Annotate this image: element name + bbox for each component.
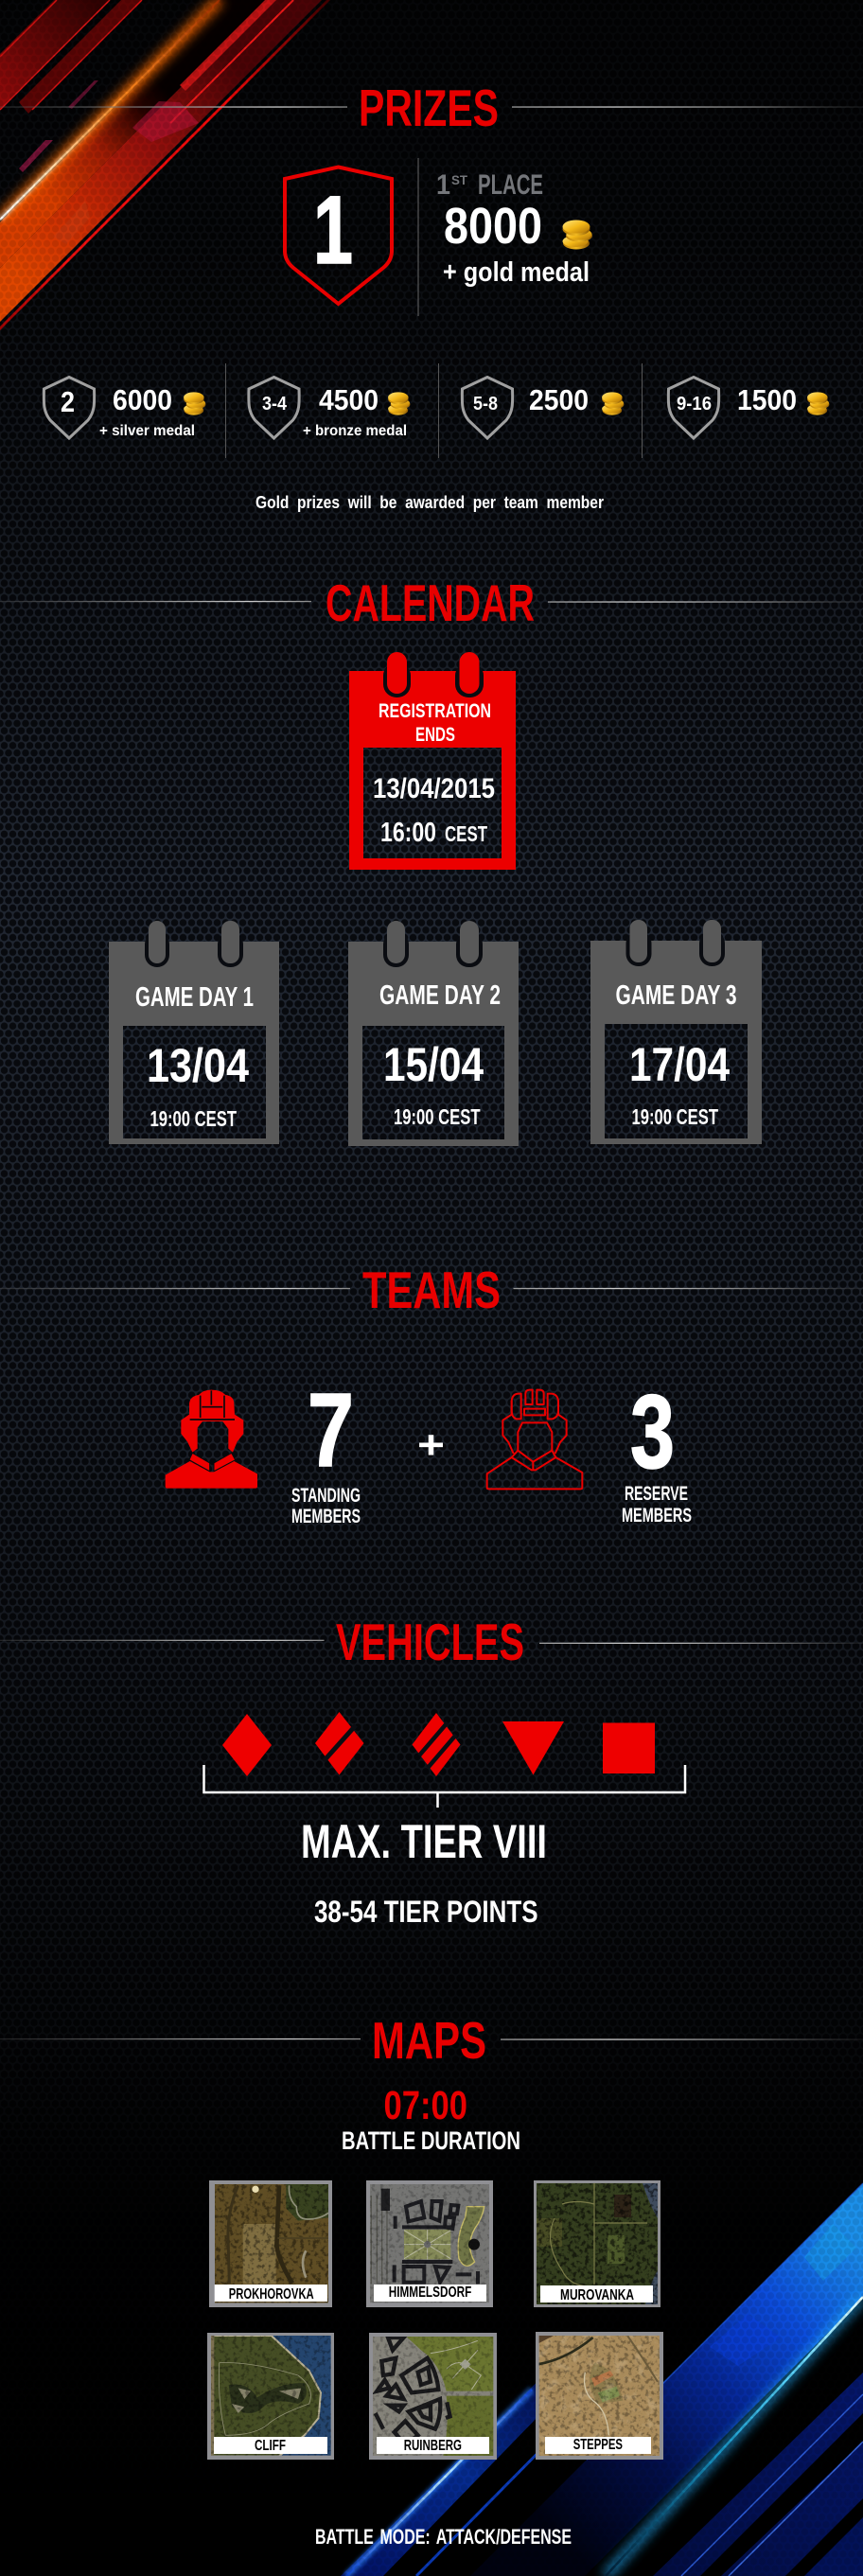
- first place shield: 1: [313, 176, 353, 284]
- first place shield: [285, 167, 392, 304]
- bracket: [204, 1765, 685, 1808]
- seven standing members: [291, 1372, 361, 1527]
- divider: [438, 363, 439, 458]
- map: Himmelsdorf: [366, 2180, 493, 2307]
- battle duration value: 07:00: [384, 2083, 467, 2128]
- prize note: Gold prizes will be awarded per team member: [255, 493, 604, 512]
- first place label: 1: [436, 169, 450, 201]
- prizes heading: PRIZES: [359, 79, 499, 137]
- map: Cliff: CLIFF: [255, 2438, 286, 2454]
- icon: artillery: [603, 1722, 655, 1773]
- first place amount: 8000: [444, 198, 542, 255]
- fifth to eighth place prize: 2500: [529, 383, 589, 416]
- first place label: ST: [451, 172, 467, 187]
- ninth to sixteenth place prize: 1500: [737, 383, 797, 416]
- calendar heading: CALENDAR: [326, 573, 535, 632]
- calendar: game day 3: GAME DAY 3: [615, 980, 736, 1011]
- vehicles heading: VEHICLES: [336, 1613, 524, 1671]
- third to fourth place prize: 4500: [319, 383, 379, 416]
- calendar: game day 1: [109, 921, 279, 1144]
- calendar: game day 3: [590, 920, 762, 1144]
- calendar: registration ends: 13/04/2015: [373, 773, 495, 804]
- calendar: game day 2: 19:00 CEST: [394, 1104, 481, 1129]
- icon: tank destroyer: [502, 1721, 564, 1775]
- icon: reserve member helmet: [487, 1390, 582, 1489]
- teams heading: TEAMS: [362, 1261, 501, 1319]
- section: calendar: [0, 573, 863, 1146]
- third to fourth place prize: 3-4: [262, 394, 288, 415]
- icon: gold coins: [562, 220, 592, 250]
- calendar: registration ends: ENDS: [415, 724, 455, 746]
- map: Murovanka: [534, 2180, 660, 2307]
- map: Prokhorovka: [209, 2180, 332, 2307]
- plus sign: +: [417, 1422, 445, 1467]
- tier points text: 38-54 TIER POINTS: [314, 1895, 537, 1929]
- divider: [225, 363, 226, 458]
- calendar: game day 3: 17/04: [629, 1038, 730, 1091]
- map: Murovanka: MUROVANKA: [560, 2287, 634, 2303]
- calendar: game day 2: 15/04: [383, 1038, 484, 1091]
- calendar: game day 1: GAME DAY 1: [135, 982, 254, 1013]
- map: Ruinberg: [369, 2333, 497, 2460]
- calendar: game day 1: 19:00 CEST: [150, 1106, 237, 1131]
- max tier text: MAX. TIER VIII: [301, 1815, 547, 1868]
- ninth to sixteenth place prize: 9-16: [677, 394, 712, 415]
- seven standing members: MEMBERS: [291, 1506, 361, 1527]
- calendar: registration ends: CEST: [445, 821, 487, 846]
- three reserve members: 3: [630, 1374, 675, 1491]
- calendar: game day 2: GAME DAY 2: [379, 980, 501, 1011]
- map: Prokhorovka: PROKHOROVKA: [229, 2286, 314, 2303]
- icon: heavy tank: [413, 1713, 460, 1776]
- divider: [642, 363, 643, 458]
- first place divider: [418, 158, 419, 316]
- calendar: game day 2: [348, 921, 519, 1146]
- section: prizes: [0, 79, 863, 512]
- three reserve members: MEMBERS: [622, 1505, 692, 1526]
- section: teams: [0, 1261, 863, 1527]
- map: Steppes: [536, 2332, 663, 2460]
- fifth to eighth place prize: [462, 377, 624, 438]
- section: maps: [0, 2011, 863, 2549]
- three reserve members: [622, 1374, 692, 1526]
- map: Himmelsdorf: HIMMELSDORF: [389, 2285, 471, 2301]
- second place prize: 6000: [113, 383, 172, 416]
- ninth to sixteenth place prize: [668, 377, 829, 438]
- icon: standing member helmet: [166, 1390, 257, 1489]
- calendar: registration ends: 16:00: [380, 818, 436, 848]
- map: Cliff: [207, 2333, 334, 2460]
- section: vehicles: [0, 1613, 863, 1929]
- fifth to eighth place prize: 5-8: [473, 394, 498, 415]
- map: Ruinberg: RUINBERG: [404, 2438, 462, 2454]
- calendar: registration ends: REGISTRATION: [379, 700, 491, 722]
- second place prize: 2: [61, 385, 75, 418]
- three reserve members: RESERVE: [625, 1483, 688, 1505]
- calendar: game day 1: 13/04: [147, 1039, 249, 1092]
- icon: light tank: [222, 1714, 272, 1776]
- calendar: game day 3: 19:00 CEST: [632, 1104, 718, 1129]
- calendar: registration ends: [349, 652, 516, 870]
- decorative blue streaks, bottom right: [341, 2177, 863, 2576]
- battle duration label: BATTLE DURATION: [342, 2126, 520, 2155]
- third to fourth place prize: [249, 377, 410, 439]
- battle mode text: BATTLE MODE: ATTACK/DEFENSE: [315, 2525, 572, 2549]
- seven standing members: STANDING: [291, 1485, 361, 1507]
- gold medal text: + gold medal: [443, 257, 590, 288]
- decorative red streaks, top left: [0, 0, 397, 341]
- first place label: [436, 169, 543, 201]
- map: Steppes: STEPPES: [573, 2437, 623, 2453]
- first place label: PLACE: [478, 169, 543, 201]
- third to fourth place prize: + bronze medal: [303, 423, 407, 439]
- second place prize: + silver medal: [99, 423, 195, 439]
- seven standing members: 7: [308, 1372, 354, 1489]
- icon: medium tank: [315, 1712, 363, 1775]
- second place prize: [44, 377, 205, 439]
- maps heading: MAPS: [372, 2011, 486, 2070]
